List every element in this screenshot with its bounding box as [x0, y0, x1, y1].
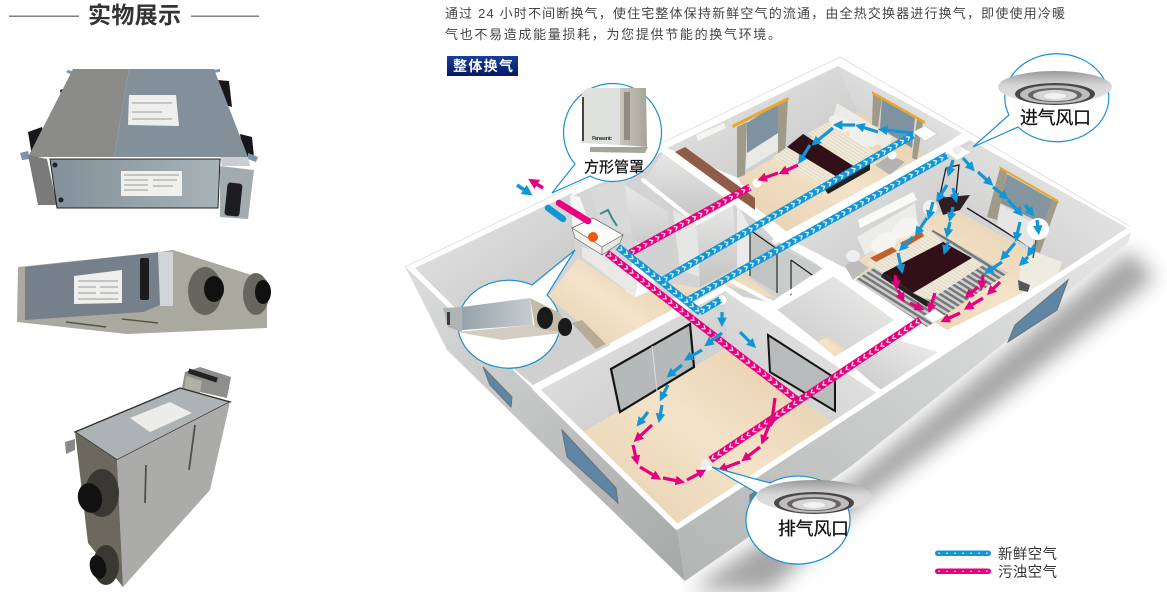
callout: 方形管罩: [552, 83, 662, 193]
icon: exhaust vent: [756, 480, 872, 514]
legend: [935, 546, 1057, 581]
unit box: [572, 210, 623, 255]
room: bathroom: [855, 340, 938, 390]
house floor plan: [405, 57, 1155, 592]
white partition wall tops: [535, 135, 1132, 527]
callout: 进气风口: 进气风口: [1020, 108, 1091, 128]
ground shadow: [690, 250, 1155, 592]
room: closet: [775, 275, 897, 359]
room: living room: [538, 290, 880, 525]
blue fresh air ducts: [548, 132, 949, 315]
photo: ceiling unit, underside view: [17, 250, 271, 334]
icon: intake vent: [998, 71, 1112, 105]
badge: 整体换气: 整体换气: [453, 58, 513, 74]
stale air flow arrows: [633, 165, 1000, 481]
intro text: [445, 6, 1065, 42]
intro text: 通过 24 小时不间断换气，使住宅整体保持新鲜空气的流通，由全热交换器进行换气，即使使用冷暖: [445, 6, 1065, 21]
callout: 进气风口: [973, 54, 1112, 147]
photo: ceiling unit, top view: [20, 69, 258, 219]
callout: 方形管罩: 方形管罩: [584, 159, 644, 176]
badge: 整体换气: [447, 56, 518, 76]
icon: ventilation unit: [443, 298, 572, 340]
legend: 新鲜空气: [998, 546, 1057, 563]
callout: 排气风口: [712, 467, 872, 564]
outdoor arrows: [517, 183, 543, 191]
magenta exhaust ducts: [559, 184, 922, 463]
room: bedroom 2: [797, 140, 1129, 330]
callout: 排气风口: 排气风口: [778, 519, 849, 539]
room: utility room with unit: [415, 165, 672, 385]
outer windows: [483, 280, 1068, 520]
room: hallway: [625, 150, 827, 308]
outer walls: [405, 267, 685, 581]
icon: square duct cap: Panasonic: [592, 136, 612, 142]
legend: 污浊空气: [998, 564, 1057, 581]
heading: 实物展示: 实物展示: [88, 2, 181, 28]
photo: vertical unit: [65, 367, 231, 587]
intro text: 气也不易造成能量损耗，为您提供节能的换气环境。: [445, 27, 781, 42]
callout: unit close-up: [443, 250, 575, 368]
wall tops: [405, 57, 1133, 527]
fresh air flow arrows: [641, 125, 1038, 421]
room: bedroom 1: [667, 66, 962, 232]
